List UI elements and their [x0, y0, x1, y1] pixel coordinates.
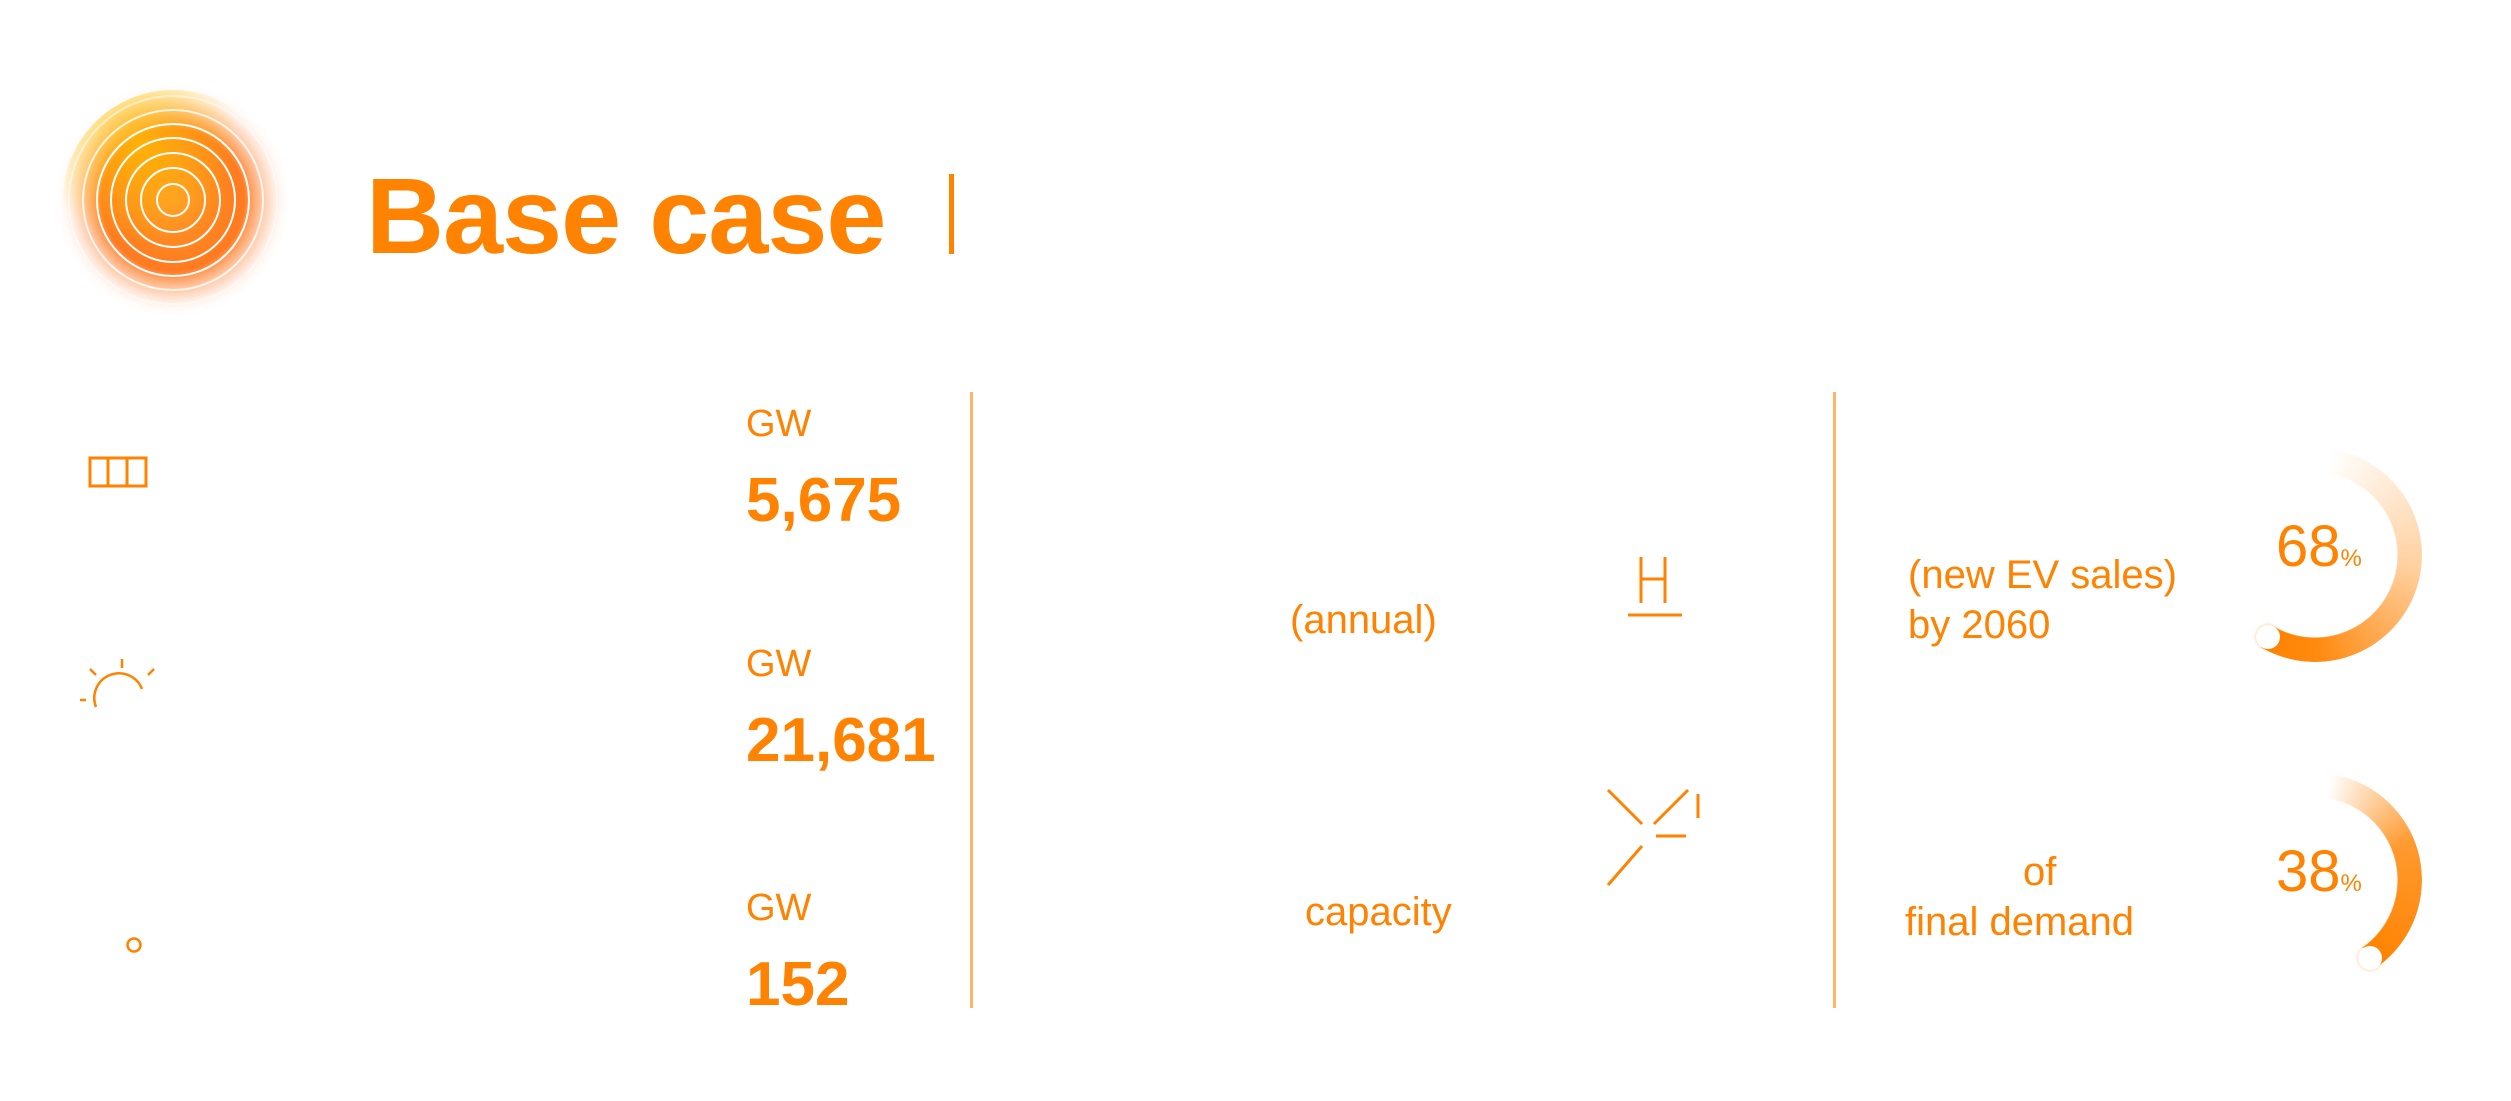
- stat: 152 GW: GW: [746, 887, 811, 929]
- title: Base case: [366, 155, 885, 276]
- icon: small circle: [126, 937, 142, 953]
- text: (annual): (annual): [1290, 598, 1437, 642]
- icon: solar panel grid: [88, 456, 148, 488]
- stat: 152 GW: [746, 887, 849, 1019]
- icon: H: [1628, 557, 1682, 616]
- gauge: 68%: 68%: [2276, 514, 2362, 579]
- title cursor: [949, 174, 954, 254]
- stat: 21,681 GW: 21,681: [746, 706, 936, 775]
- gauge: 38%: [2276, 775, 2422, 972]
- text: new EV sales: [1908, 553, 2177, 647]
- text: new EV sales: by 2060: [1908, 603, 2050, 647]
- icon: arrows: [1606, 789, 1700, 886]
- text: of final demand: final demand: [1905, 900, 2134, 944]
- stat: 152 GW: 152: [746, 950, 849, 1019]
- text: new EV sales: (new EV sales): [1908, 553, 2177, 597]
- stat: 5,675 GW: 5,675: [746, 466, 901, 535]
- text: capacity: capacity: [1305, 890, 1452, 934]
- icon: concentric glow: [63, 90, 282, 310]
- stat: 5,675 GW: [746, 403, 901, 535]
- icon: sun: [80, 659, 155, 708]
- stat: 5,675 GW: GW: [746, 403, 811, 445]
- text: of final demand: of: [2023, 850, 2056, 894]
- gauge: 38%: 38%: [2276, 839, 2362, 904]
- stat: 21,681 GW: GW: [746, 643, 811, 685]
- stat: 21,681 GW: [746, 643, 936, 775]
- text: of final demand: [1905, 850, 2134, 944]
- gauge: 68%: [2254, 452, 2422, 662]
